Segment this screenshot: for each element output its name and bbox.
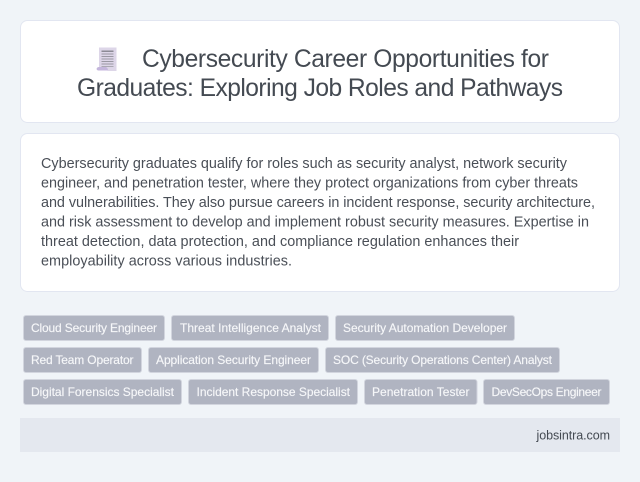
tag: Red Team Operator bbox=[24, 348, 142, 372]
panel: header bbox=[20, 20, 620, 122]
text block: description: employability across various industries. bbox=[41, 254, 292, 270]
tag: Penetration Tester: Penetration Tester bbox=[372, 385, 470, 399]
tag: Penetration Tester bbox=[364, 380, 477, 404]
tag: Cloud Security Engineer: Cloud Security Engineer bbox=[31, 321, 157, 335]
icon: document scroll bbox=[96, 48, 116, 71]
tag: Incident Response Specialist: Incident Response Specialist bbox=[196, 385, 351, 399]
tag: Threat Intelligence Analyst bbox=[172, 316, 328, 340]
title: Graduates: Exploring Job Roles and Pathways bbox=[77, 75, 563, 102]
text block: description: and vulnerabilities. They also pursue careers in incident response, security architecture, bbox=[41, 195, 595, 211]
tag: Digital Forensics Specialist bbox=[24, 380, 182, 404]
tag: Security Automation Developer bbox=[336, 316, 514, 340]
text block: description: engineer, and penetration tester, where they protect organizations from cyber threats bbox=[41, 176, 578, 192]
tag: SOC Analyst: SOC (Security Operations Center) Analyst bbox=[333, 353, 553, 367]
text block: description: Cybersecurity graduates qualify for roles such as security analyst, network security bbox=[41, 156, 568, 172]
tag: Red Team Operator: Red Team Operator bbox=[31, 353, 134, 367]
tag: Threat Intelligence Analyst: Threat Intelligence Analyst bbox=[180, 321, 322, 335]
text block: description: and risk assessment to develop and implement robust security measures. Expertise in bbox=[41, 214, 589, 230]
tags: job roles bbox=[24, 316, 610, 404]
tag: Application Security Engineer: Application Security Engineer bbox=[156, 353, 311, 367]
tag: Incident Response Specialist bbox=[188, 380, 358, 404]
panel: description bbox=[20, 134, 620, 292]
title: Cybersecurity Career Opportunities for bbox=[142, 46, 549, 73]
text block: description bbox=[41, 156, 595, 270]
tag: Application Security Engineer bbox=[148, 348, 318, 372]
footer bar bbox=[20, 418, 620, 452]
tag: DevSecOps Engineer bbox=[484, 380, 610, 404]
tag: Digital Forensics Specialist: Digital Forensics Specialist bbox=[31, 385, 175, 399]
footer: source: jobsintra.com bbox=[536, 428, 610, 442]
text block: description: threat detection, data protection, and compliance regulation enhances their bbox=[41, 234, 519, 250]
tag: DevSecOps Engineer: DevSecOps Engineer bbox=[492, 385, 602, 399]
title bbox=[77, 46, 563, 102]
tag: Security Automation Developer: Security Automation Developer bbox=[343, 321, 507, 335]
tag: SOC Analyst bbox=[326, 348, 560, 372]
tag: Cloud Security Engineer bbox=[24, 316, 164, 340]
